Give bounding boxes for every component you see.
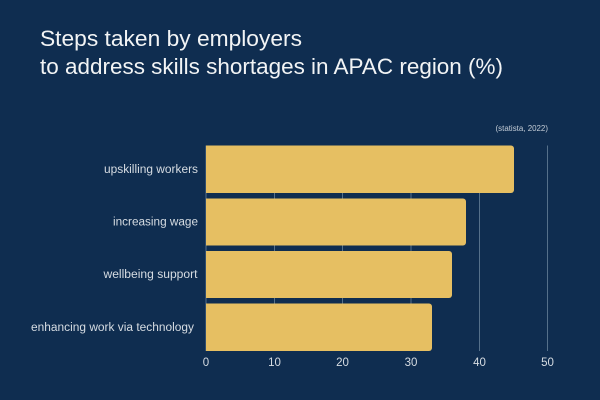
bar: increasing wage xyxy=(206,198,466,246)
category labels: upskilling workers xyxy=(104,164,198,176)
axis labels: 30 xyxy=(405,357,417,369)
axis labels: 10 xyxy=(268,357,281,369)
source note: (statista, 2022) xyxy=(496,124,548,133)
category labels xyxy=(31,164,198,334)
bar: enhancing work via technology xyxy=(206,304,432,351)
axis labels xyxy=(203,357,554,369)
category labels: enhancing work via technology xyxy=(31,322,194,334)
title xyxy=(40,26,503,79)
category labels: increasing wage xyxy=(113,216,198,228)
bar: upskilling workers xyxy=(206,146,514,193)
axis labels: 20 xyxy=(336,357,349,369)
title: Steps taken by employers xyxy=(40,26,302,51)
axis labels: 40 xyxy=(473,357,486,369)
bar: wellbeing support xyxy=(206,251,452,298)
bar chart xyxy=(31,146,554,369)
category labels: wellbeing support xyxy=(102,269,198,281)
axis labels: 0 xyxy=(203,357,209,369)
axis labels: 50 xyxy=(541,357,554,369)
title: to address skills shortages in APAC region (%) xyxy=(40,54,503,79)
